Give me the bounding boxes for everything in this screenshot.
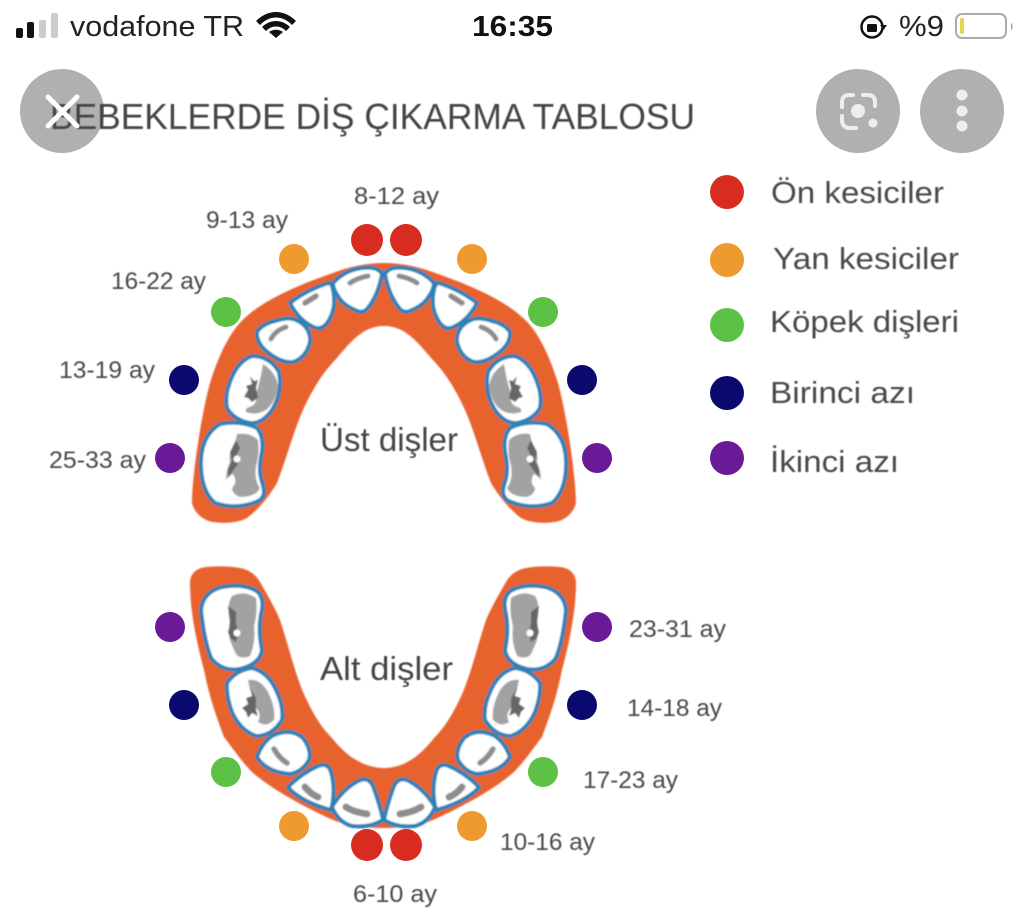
legend bbox=[710, 175, 959, 479]
chart: lower teeth bbox=[190, 566, 576, 828]
upper markers bbox=[155, 224, 612, 473]
icon: close bbox=[48, 97, 77, 126]
button: visual search bbox=[816, 69, 900, 153]
legend item: canines bbox=[710, 304, 959, 342]
lower age labels: 10-16 ay bbox=[500, 829, 595, 856]
chart: upper teeth bbox=[192, 263, 576, 523]
icon: rotation lock bbox=[862, 16, 887, 38]
lower age labels: 6-10 ay bbox=[353, 881, 437, 908]
upper jaw label: Üst dişler bbox=[320, 421, 458, 458]
legend item: first molar: Birinci azı bbox=[770, 375, 915, 410]
clock: 16:35 bbox=[472, 11, 553, 43]
upper age labels: 25-33 ay bbox=[49, 447, 146, 474]
lower age labels bbox=[353, 616, 726, 908]
legend item: lateral incisors bbox=[710, 241, 959, 277]
lower right teeth bbox=[384, 586, 566, 826]
status bar bbox=[16, 11, 1012, 43]
battery percentage: %9 bbox=[899, 11, 944, 43]
lower age labels: 17-23 ay bbox=[583, 767, 678, 794]
upper age labels bbox=[49, 183, 439, 474]
icon: battery bbox=[956, 14, 1012, 38]
legend item: first molar bbox=[710, 375, 915, 410]
lower age labels: 14-18 ay bbox=[627, 695, 722, 722]
lower gum bbox=[190, 566, 576, 828]
legend item: canines: Köpek dişleri bbox=[770, 304, 959, 339]
lower jaw label: Alt dişler bbox=[320, 650, 453, 687]
upper gum bbox=[192, 263, 576, 523]
legend item: second molar bbox=[710, 441, 899, 479]
upper age labels: 9-13 ay bbox=[206, 207, 288, 234]
legend item: lateral incisors: Yan kesiciler bbox=[773, 241, 959, 276]
legend item: central incisors bbox=[710, 175, 944, 210]
upper age labels: 16-22 ay bbox=[111, 268, 206, 295]
lower left teeth bbox=[201, 586, 383, 826]
icon: wifi bbox=[258, 15, 294, 38]
legend item: central incisors: Ön kesiciler bbox=[771, 175, 944, 210]
close button background bbox=[20, 69, 104, 153]
upper age labels: 13-19 ay bbox=[59, 357, 155, 384]
title: BEBEKLERDE DİŞ ÇIKARMA TABLOSU bbox=[50, 96, 695, 137]
carrier name: vodafone TR bbox=[70, 11, 244, 43]
upper age labels: 8-12 ay bbox=[354, 183, 439, 210]
legend item: second molar: İkinci azı bbox=[770, 444, 899, 479]
icon: cellular signal bbox=[16, 13, 58, 38]
lower markers bbox=[155, 612, 612, 861]
upper right teeth bbox=[385, 268, 566, 506]
lower age labels: 23-31 ay bbox=[629, 616, 726, 643]
upper left teeth bbox=[201, 268, 382, 506]
button: more options bbox=[920, 69, 1004, 153]
